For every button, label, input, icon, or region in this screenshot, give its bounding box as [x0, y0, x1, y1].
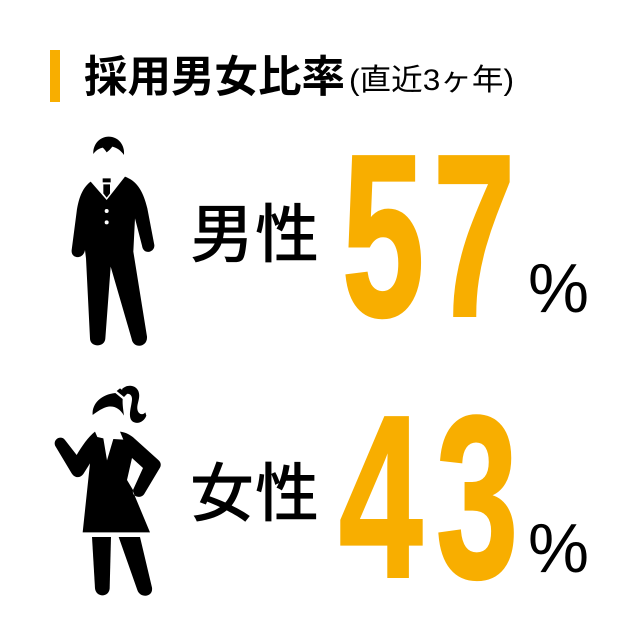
number: 57: 5 — [342, 107, 424, 366]
heading: recruitment gender ratio: (直近3ヶ年) — [349, 64, 514, 97]
number: 43: 3 — [436, 369, 518, 627]
label: female: 女性 — [190, 458, 320, 530]
number: 43: 4 — [339, 369, 423, 626]
number: 57 — [342, 107, 515, 366]
heading: recruitment gender ratio — [50, 50, 514, 102]
number: 43 — [339, 369, 518, 627]
icon: man in suit — [72, 137, 154, 346]
label: male: 男性 — [190, 199, 320, 271]
icon: woman in skirt suit — [55, 386, 161, 596]
percent sign: male: % — [528, 248, 589, 327]
percent sign: female: % — [528, 508, 589, 587]
number: 57: 7 — [433, 107, 515, 366]
heading: recruitment gender ratio: 採用男女比率 — [84, 54, 345, 102]
